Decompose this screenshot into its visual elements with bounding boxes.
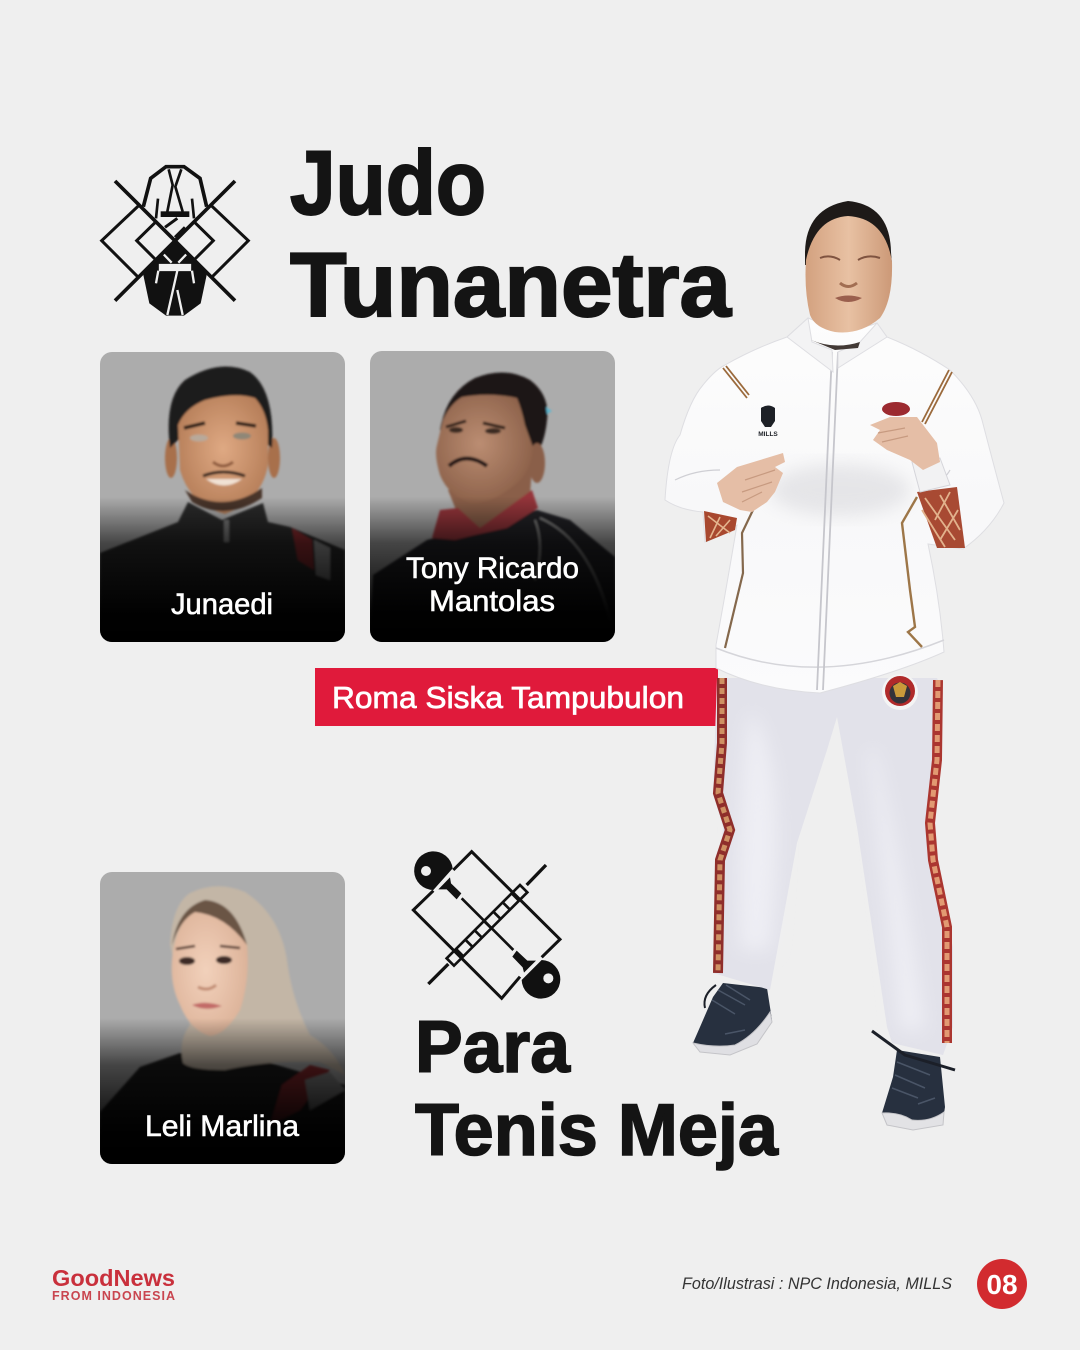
icon: judo gi with crossed diamonds (102, 167, 248, 316)
body (100, 1053, 345, 1164)
cuff pattern: right (917, 487, 965, 548)
jacket (665, 318, 1004, 693)
photo credit: Foto/Ilustrasi : NPC Indonesia, MILLS (682, 1274, 953, 1293)
page number badge: 08 (986, 1269, 1018, 1300)
piping (723, 366, 952, 424)
face (436, 395, 533, 503)
heading: Tunanetra: Tunanetra (290, 235, 732, 336)
emblem on chest (882, 402, 910, 416)
collar (432, 490, 538, 540)
face (172, 905, 248, 1036)
name: Mantolas: Mantolas (429, 585, 555, 618)
hand: left (717, 453, 785, 512)
cuff: right (912, 458, 950, 492)
face (178, 395, 268, 514)
pants (713, 678, 953, 1055)
panel: Tony Ricardo Mantolas portrait card (370, 351, 615, 642)
ears (165, 438, 177, 478)
shoe: left (693, 983, 772, 1055)
panel: Roma Siska Tampubulon name banner (315, 668, 718, 726)
panel: Leli Marlina portrait card (100, 872, 345, 1164)
figure: Roma Siska Tampubulon in white tracksuit (665, 201, 1004, 1130)
heading: Tenis Meja: Tenis Meja (415, 1090, 779, 1171)
icon: table tennis paddles and table (413, 851, 560, 999)
logo: GoodNews from Indonesia (52, 1265, 175, 1303)
logo: GoodNews from Indonesia: FROM INDONESIA (52, 1289, 175, 1303)
page number badge (977, 1259, 1027, 1309)
hair (440, 372, 547, 452)
name: Roma Siska Tampubulon: Roma Siska Tampubulon (332, 680, 684, 715)
name: Leli Marlina: Leli Marlina (145, 1110, 299, 1143)
logo: Mills (758, 406, 778, 438)
heading: Para: Para (415, 1007, 571, 1088)
hijab (170, 886, 345, 1075)
name: Tony Ricardo: Tony Ricardo (406, 552, 579, 585)
name: Junaedi: Junaedi (171, 588, 273, 621)
jacket (100, 502, 345, 642)
zipper (817, 352, 838, 690)
logo: GoodNews from Indonesia: GoodNews (52, 1265, 175, 1291)
logo: Mills: MILLS (758, 431, 778, 438)
shoe: right (872, 1031, 955, 1130)
head (805, 201, 892, 332)
emblem on pants (882, 674, 918, 710)
collar (787, 318, 887, 372)
neck (447, 466, 533, 528)
panel: Junaedi portrait card (100, 352, 345, 642)
cuff pattern: left (704, 511, 737, 542)
ear (529, 443, 545, 483)
hair (169, 367, 272, 448)
jersey (370, 510, 615, 642)
heading: Judo: Judo (290, 133, 486, 234)
hand: right (870, 417, 940, 470)
